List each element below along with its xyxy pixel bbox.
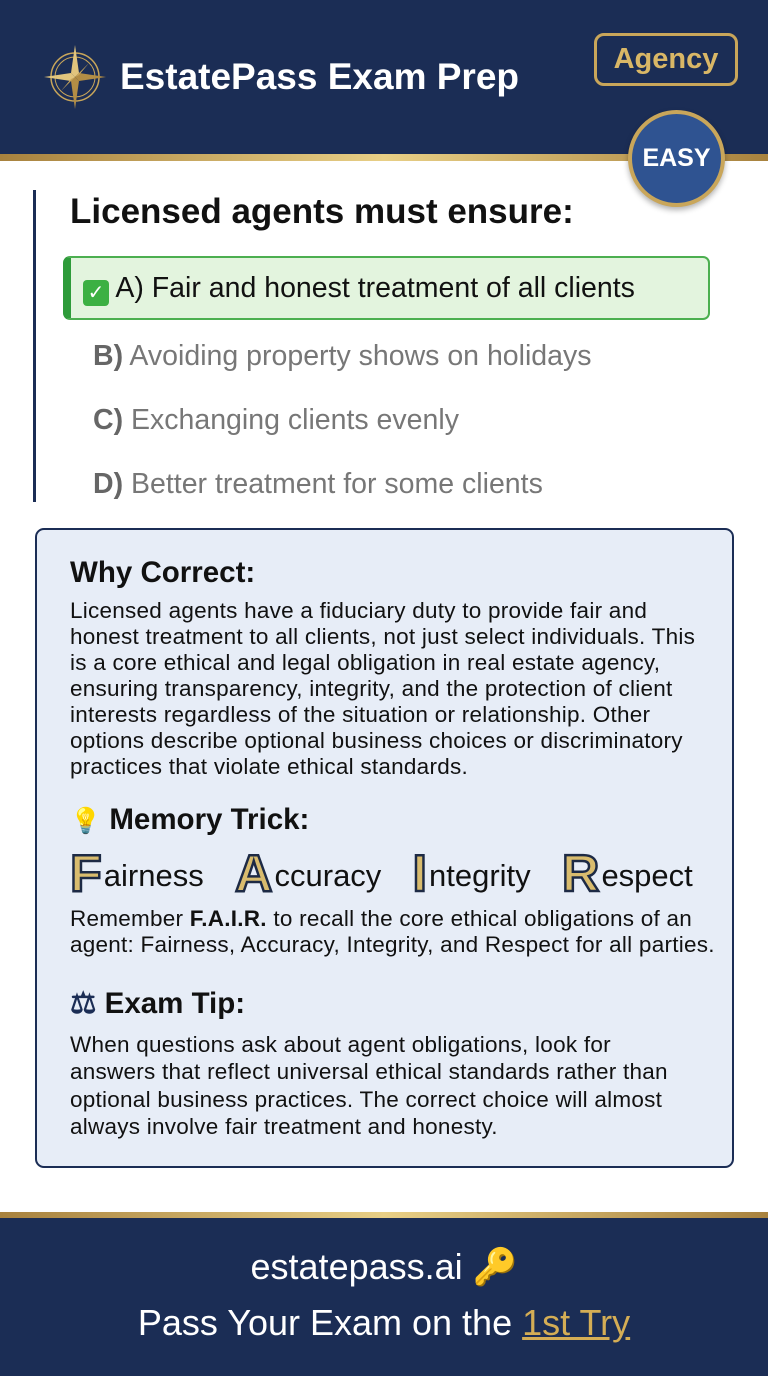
text: memory trick: Remember F.A.I.R. to recall the core ethical obligations of an [70, 906, 692, 931]
icon: compass logo [44, 45, 106, 109]
option A correct: ✓ [88, 282, 104, 304]
text: why correct: Licensed agents have a fiduciary duty to provide fair and [70, 598, 647, 623]
text: exam tip: always involve fair treatment and honesty. [70, 1114, 498, 1139]
text: why correct: interests regardless of the situation or relationship. Other [70, 702, 650, 727]
FAIR mnemonic: F [70, 845, 102, 903]
question block [33, 190, 723, 502]
option D: D) Better treatment for some clients [93, 468, 543, 500]
FAIR mnemonic: airness ccuracy ntegrity espect [104, 858, 693, 893]
title: EstatePass Exam Prep [120, 56, 519, 97]
text: why correct [70, 598, 695, 779]
badge: Agency [594, 33, 738, 86]
heading: Exam Tip: ⚖ Exam Tip: [70, 987, 245, 1020]
badge: EASY: EASY [642, 144, 711, 172]
question heading: Licensed agents must ensure: [70, 192, 574, 231]
footer [0, 1212, 768, 1376]
footer url: estatepass.ai 🔑 [251, 1246, 517, 1287]
panel: explanation [35, 528, 734, 1168]
footer tagline: Pass Your Exam on the 1st Try [138, 1302, 630, 1343]
header bar [0, 0, 768, 156]
text: memory trick: agent: Fairness, Accuracy, Integrity, and Respect for all parties. [70, 932, 715, 957]
FAIR mnemonic: I [413, 845, 427, 903]
heading: Why Correct: Why Correct: [70, 556, 255, 589]
FAIR mnemonic [70, 845, 693, 903]
FAIR mnemonic: A [235, 845, 272, 903]
heading: Memory Trick: 💡 Memory Trick: [70, 803, 309, 836]
option A correct: A) Fair and honest treatment of all clients [115, 272, 635, 304]
text: why correct: is a core ethical and legal obligation in real estate agency, [70, 650, 660, 675]
text: exam tip [70, 1032, 668, 1139]
text: memory trick [70, 906, 715, 957]
option C: C) Exchanging clients evenly [93, 404, 459, 436]
text: why correct: practices that violate ethical standards. [70, 754, 468, 779]
FAIR mnemonic: R [562, 845, 599, 903]
text: exam tip: answers that reflect universal ethical standards rather than [70, 1059, 668, 1084]
text: why correct: ensuring transparency, integrity, and the protection of client [70, 676, 672, 701]
badge: Agency: Agency [614, 43, 718, 75]
text: why correct: options describe optional business choices or discriminatory [70, 728, 683, 753]
option A correct [63, 256, 710, 320]
option B: B) Avoiding property shows on holidays [93, 340, 592, 372]
badge: EASY [628, 110, 725, 207]
text: exam tip: optional business practices. The correct choice will almost [70, 1087, 662, 1112]
text: why correct: honest treatment to all clients, not just select individuals. This [70, 624, 695, 649]
text: exam tip: When questions ask about agent obligations, look for [70, 1032, 611, 1057]
